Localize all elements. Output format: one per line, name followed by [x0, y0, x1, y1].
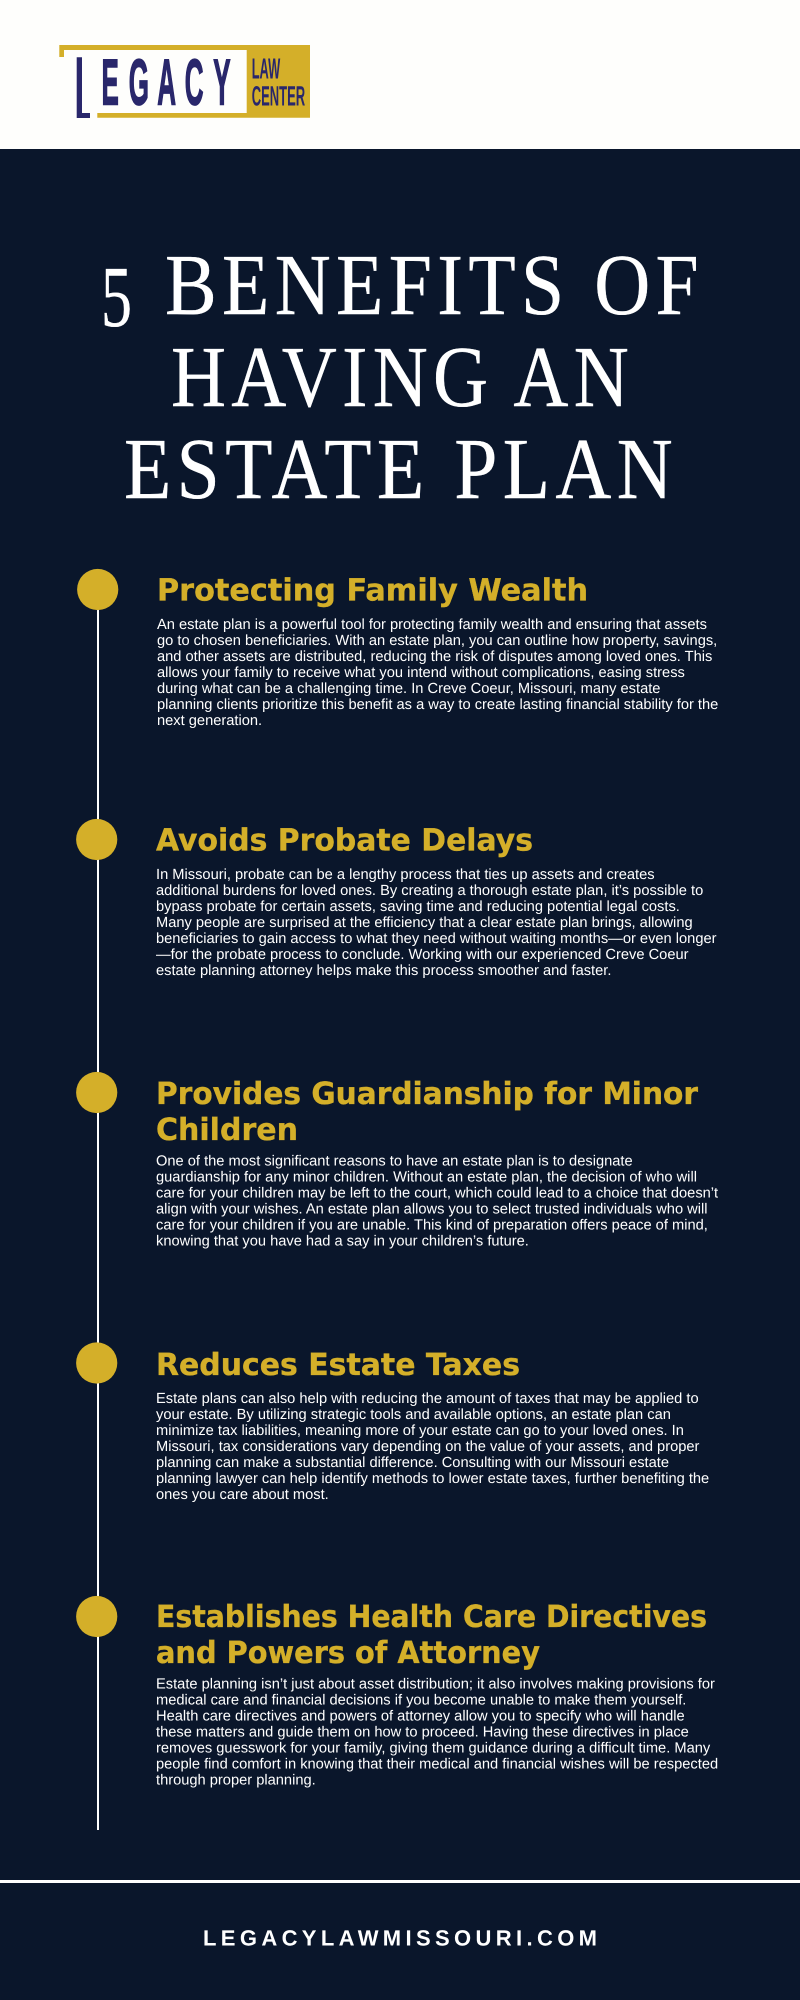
heading: guardianship for minor children: [156, 1077, 698, 1148]
panel: protecting family wealth: [77, 569, 722, 729]
body text: reduces estate taxes: minimize tax liabilities, meaning more of your estate can go to your loved ones. In: [156, 1423, 684, 1439]
heading: guardianship for minor children: Provides Guardianship for Minor: [156, 1077, 698, 1112]
heading: reduces estate taxes: Reduces Estate Taxes: [156, 1348, 520, 1383]
body text: protecting family wealth: during what can be a challenging time. In Creve Coeur, Missouri, many estate: [157, 681, 660, 697]
body text: protecting family wealth: and other assets are distributed, reducing the risk of disputes among loved ones. This: [157, 649, 712, 665]
panel: reduces estate taxes: [76, 1342, 713, 1503]
body text: health care directives and powers of attorney: removes guesswork for your family, giving them guidance during a difficult time. Many: [156, 1741, 711, 1757]
body text: health care directives and powers of attorney: Health care directives and powers of attorney allow you to specify who will handle: [156, 1709, 685, 1725]
body text: reduces estate taxes: planning lawyer can help identify methods to lower estate taxes, further benefiting the: [156, 1471, 709, 1487]
body text: health care directives and powers of attorney: these matters and guide them on how to proceed. Having these directives in place: [156, 1725, 689, 1741]
title: HAVING AN: [171, 328, 634, 425]
body text: avoids probate delays: —for the probate process to conclude. Working with our experienced Creve Coeur: [156, 947, 689, 963]
logo: Legacy Law Center: [59, 45, 310, 118]
panel: health care directives and powers of attorney: [76, 1596, 722, 1789]
body text: guardianship for minor children: guardianship for any minor children. Without an estate plan, the decision of who will: [156, 1170, 697, 1186]
heading: guardianship for minor children: Children: [156, 1113, 298, 1148]
heading: health care directives and powers of attorney: Establishes Health Care Directives: [156, 1600, 707, 1635]
body text: avoids probate delays: additional burdens for loved ones. By creating a thorough estate plan, it’s possible to: [156, 883, 703, 899]
body text: protecting family wealth: allows your family to receive what you intend without complications, easing stress: [157, 665, 685, 681]
timeline vertical line: [97, 590, 99, 1830]
heading: protecting family wealth: Protecting Family Wealth: [157, 574, 588, 609]
icon: timeline dot 5: [76, 1596, 117, 1637]
body text: health care directives and powers of attorney: medical care and financial decisions if you become unable to make them yourself.: [156, 1693, 686, 1709]
heading: health care directives and powers of attorney: and Powers of Attorney: [156, 1636, 540, 1671]
body text: guardianship for minor children: care for your children may be left to the court, which could lead to a choice that doesn’t: [156, 1186, 718, 1202]
body text: reduces estate taxes: your estate. By utilizing strategic tools and available options, an estate plan can: [156, 1407, 671, 1423]
body text: guardianship for minor children: align with your wishes. An estate plan allows you to select trusted individuals who will: [156, 1202, 708, 1218]
icon: timeline dot 3: [76, 1072, 117, 1113]
body text: health care directives and powers of attorney: Estate planning isn’t just about asset distribution; it also involves making provisions for: [156, 1677, 715, 1693]
body text: reduces estate taxes: planning can make a substantial difference. Consulting with our Missouri estate: [156, 1455, 669, 1471]
header band: [0, 0, 800, 149]
body text: avoids probate delays: Many people are surprised at the efficiency that a clear estate plan brings, allowing: [156, 915, 693, 931]
heading: health care directives and powers of attorney: [156, 1600, 707, 1671]
body text: avoids probate delays: bypass probate for certain assets, saving time and reducing potential legal costs.: [156, 899, 680, 915]
icon: timeline dot 4: [76, 1342, 117, 1384]
body text: avoids probate delays: estate planning attorney helps make this process smoother and faster.: [156, 963, 611, 979]
body text: guardianship for minor children: knowing that you have had a say in your children’s future.: [156, 1234, 529, 1250]
body text: guardianship for minor children: One of the most significant reasons to have an estate plan is to designate: [156, 1154, 633, 1170]
logo: Legacy Law Center: LAW: [252, 53, 280, 85]
body text: reduces estate taxes: Missouri, tax considerations vary depending on the value of your assets, and proper: [156, 1439, 700, 1455]
logo: Legacy Law Center: EGACY: [102, 45, 231, 118]
panel: avoids probate delays: [76, 819, 721, 979]
icon: timeline dot 1: [77, 569, 118, 610]
title: BENEFITS OF: [165, 236, 704, 333]
body text: protecting family wealth: planning clients prioritize this benefit as a way to create lasting financial stability for the: [157, 697, 718, 713]
body text: protecting family wealth: go to chosen beneficiaries. With an estate plan, you can outline how property, savings,: [157, 633, 717, 649]
body text: health care directives and powers of attorney: through proper planning.: [156, 1773, 316, 1789]
title: [101, 236, 704, 517]
icon: timeline dot 2: [76, 819, 117, 860]
footer divider: [0, 1880, 800, 1883]
title: ESTATE PLAN: [124, 420, 678, 517]
heading: avoids probate delays: Avoids Probate Delays: [156, 824, 533, 859]
title: 5: [101, 248, 132, 345]
panel: guardianship for minor children: [76, 1072, 722, 1250]
body text: avoids probate delays: In Missouri, probate can be a lengthy process that ties up assets and creates: [156, 867, 655, 883]
body text: health care directives and powers of attorney: people find comfort in knowing that their medical and financial wishes will be respected: [156, 1757, 718, 1773]
footer website: LEGACYLAWMISSOURI.COM: [203, 1926, 597, 1951]
body text: protecting family wealth: next generation.: [157, 713, 262, 729]
body text: reduces estate taxes: ones you care about most.: [156, 1487, 329, 1503]
body text: protecting family wealth: An estate plan is a powerful tool for protecting family wealth and ensuring that assets: [157, 617, 707, 633]
body text: guardianship for minor children: care for your children if you are unable. This kind of preparation offers peace of mind,: [156, 1218, 708, 1234]
body text: reduces estate taxes: Estate plans can also help with reducing the amount of taxes that may be applied to: [156, 1391, 699, 1407]
body text: avoids probate delays: beneficiaries to gain access to what they need without waiting months—or even longer: [156, 931, 717, 947]
logo: Legacy Law Center: CENTER: [252, 80, 305, 111]
